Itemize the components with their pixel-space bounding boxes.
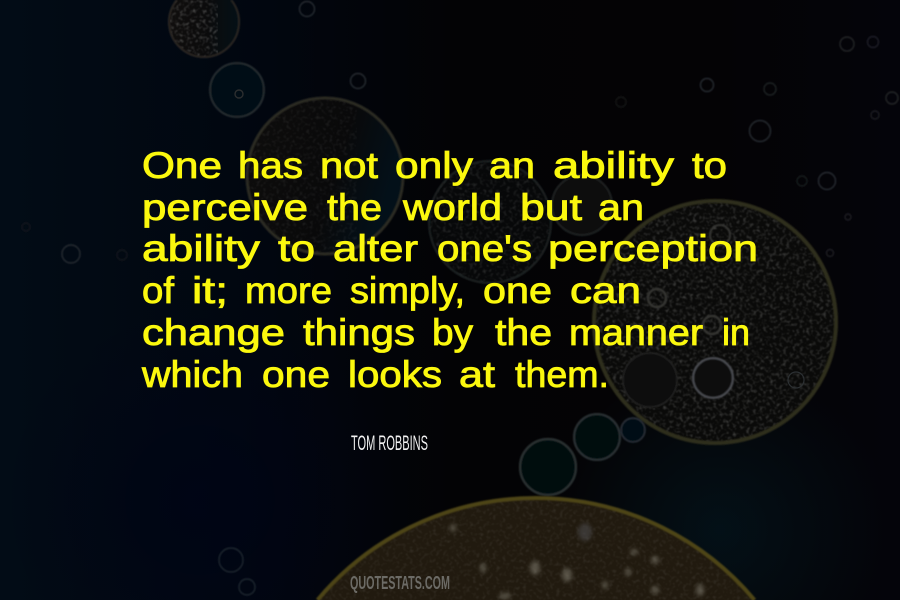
bubbles: cluster below the large bubble bbox=[520, 414, 645, 495]
quote line 5: by bbox=[432, 312, 474, 353]
bubble: large bottom bbox=[317, 497, 755, 600]
source watermark: QUOTESTATS.COM bbox=[350, 573, 450, 593]
quote line 4: of bbox=[142, 270, 175, 311]
quote line 2: an bbox=[598, 187, 644, 228]
quote line 4: simply, bbox=[350, 270, 465, 311]
quote line 6: one bbox=[262, 354, 330, 395]
quote line 2: perceive bbox=[142, 187, 308, 228]
quote line 1: ability bbox=[553, 145, 675, 186]
quote line 4: it; bbox=[192, 270, 228, 311]
bubble: large right bbox=[593, 200, 837, 444]
quote line 5: things bbox=[303, 312, 415, 353]
author name: TOM ROBBINS bbox=[351, 432, 428, 455]
quote line 4: one bbox=[483, 270, 552, 311]
bubble: middle small bbox=[552, 175, 612, 235]
quote line 1: to bbox=[692, 145, 727, 186]
quote line 1: has bbox=[238, 145, 303, 186]
quote line 2: but bbox=[520, 187, 583, 228]
quote text bbox=[141, 145, 758, 395]
quote line 5 bbox=[142, 312, 750, 353]
quote line 4: can bbox=[570, 270, 641, 311]
quote line 5: manner bbox=[569, 312, 703, 353]
quote line 5: in bbox=[722, 312, 750, 353]
quote line 2: the bbox=[327, 187, 382, 228]
bubble: upper left speckled bbox=[169, 0, 239, 58]
quote line 1: only bbox=[395, 145, 474, 186]
bubble: upper left small bbox=[210, 63, 264, 117]
quote line 5: change bbox=[142, 312, 285, 353]
bubble: middle speckled bbox=[428, 160, 552, 284]
quote line 1: an bbox=[489, 145, 535, 186]
quote line 2 bbox=[142, 187, 644, 228]
bubble: centre large behind text bbox=[247, 97, 403, 255]
quote line 5: the bbox=[495, 312, 552, 353]
quote line 4 bbox=[142, 270, 641, 311]
quote line 6: at bbox=[459, 354, 496, 395]
quote line 3 bbox=[142, 228, 758, 269]
quote line 3: perception bbox=[548, 228, 758, 269]
quote line 1: One bbox=[142, 145, 222, 186]
quote line 3: alter bbox=[333, 228, 418, 269]
quote line 2: world bbox=[402, 187, 502, 228]
quote line 6: them. bbox=[515, 354, 609, 395]
quote line 1 bbox=[142, 145, 727, 186]
quote line 4: more bbox=[245, 270, 332, 311]
quote line 3: ability bbox=[142, 228, 261, 269]
quote line 6: which bbox=[141, 354, 243, 395]
quote line 3: one's bbox=[437, 228, 532, 269]
quote line 3: to bbox=[278, 228, 315, 269]
quote line 6: looks bbox=[348, 354, 442, 395]
quote line 6 bbox=[141, 354, 609, 395]
quote line 1: not bbox=[320, 145, 379, 186]
